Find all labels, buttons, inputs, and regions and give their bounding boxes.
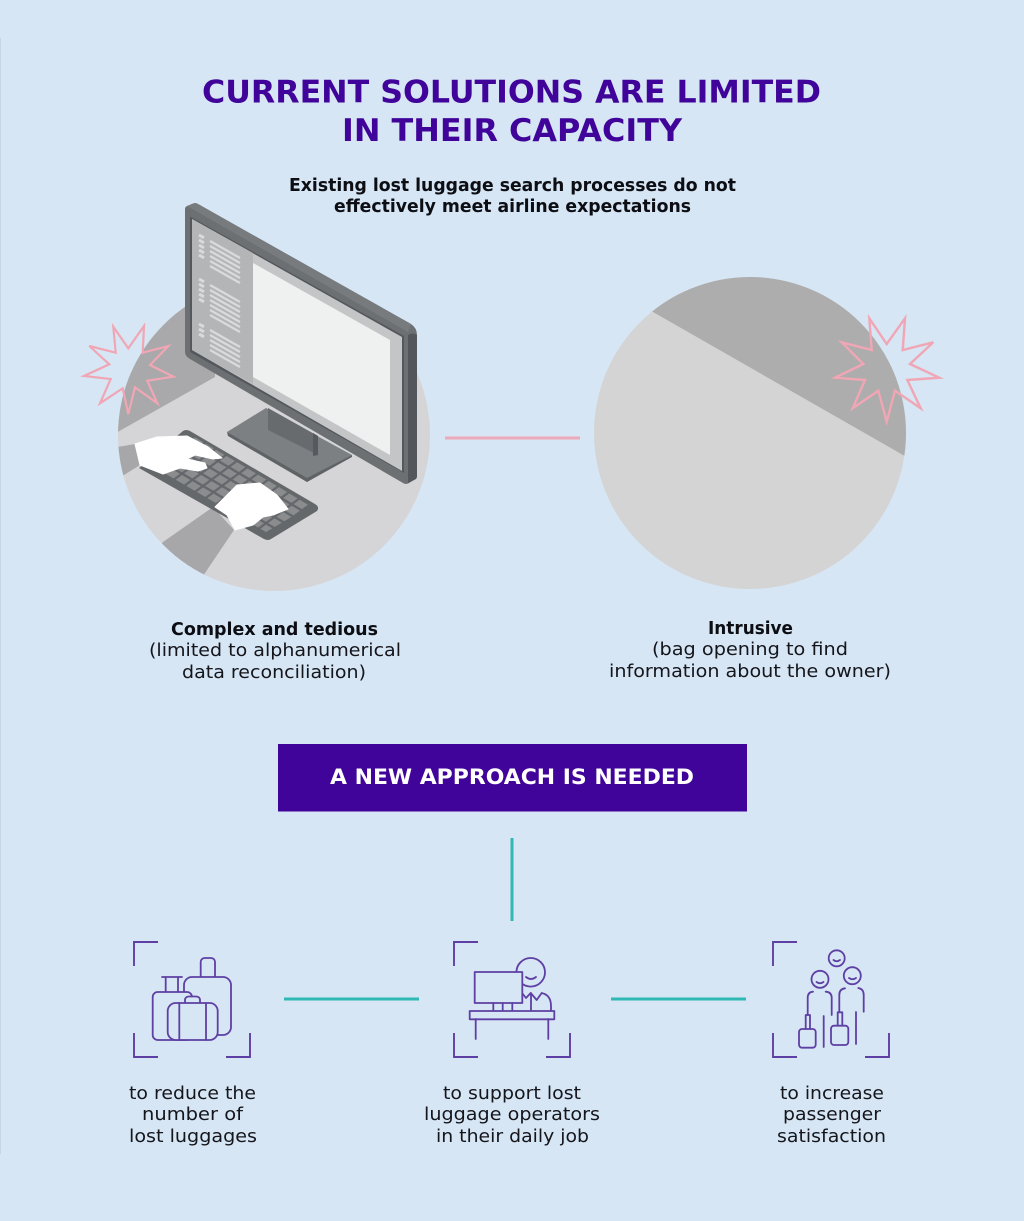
keyboard [139, 430, 318, 540]
caption: increase satisfaction: satisfaction [777, 1127, 886, 1147]
caption: reduce lost luggages: number of [142, 1105, 244, 1125]
connector: teal right [611, 998, 746, 1000]
caption: complex and tedious: data reconciliation) [182, 663, 366, 683]
subtitle: Existing lost luggage search processes do not [289, 176, 736, 196]
caption: intrusive: (bag opening to find [652, 640, 848, 660]
caption: increase satisfaction: to increase [780, 1084, 884, 1104]
icon: luggage [134, 942, 250, 1057]
monitor stand [227, 408, 352, 482]
illustration: intrusive placeholder circle [594, 270, 910, 589]
caption: support operators: luggage operators [424, 1105, 600, 1125]
connector: teal left [284, 998, 419, 1000]
subtitle [289, 176, 736, 217]
title: IN THEIR CAPACITY [342, 113, 683, 149]
caption: support operators [424, 1084, 600, 1147]
hands [135, 436, 288, 530]
illustration: person typing at a computer [100, 203, 430, 600]
caption: complex and tedious: (limited to alphanumerical [149, 641, 401, 661]
monitor [185, 203, 417, 484]
icon: passengers [773, 942, 889, 1057]
caption: support operators: to support lost [443, 1084, 581, 1104]
caption: support operators: in their daily job [436, 1127, 589, 1147]
burst icon right [835, 318, 939, 422]
connector: teal vertical [510, 838, 514, 921]
caption: complex and tedious [149, 620, 401, 683]
caption: increase satisfaction: passenger [783, 1105, 882, 1125]
banner: a new approach is needed: A NEW APPROACH IS NEEDED [330, 765, 694, 789]
title: CURRENT SOLUTIONS ARE LIMITED [202, 74, 821, 110]
caption: reduce lost luggages: to reduce the [129, 1084, 256, 1104]
icon: operator at desk [454, 942, 570, 1057]
caption: intrusive [609, 619, 891, 682]
connector: pink line [445, 436, 580, 440]
title [202, 74, 821, 149]
caption: intrusive: Intrusive [708, 619, 793, 639]
caption: increase satisfaction [777, 1084, 886, 1147]
caption: reduce lost luggages: lost luggages [129, 1127, 257, 1147]
subtitle: effectively meet airline expectations [334, 197, 691, 217]
burst icon left [84, 326, 173, 414]
caption: intrusive: information about the owner) [609, 662, 891, 682]
caption: reduce lost luggages [129, 1084, 257, 1147]
caption: complex and tedious: Complex and tedious [171, 620, 378, 640]
desk circle [118, 307, 430, 591]
banner: a new approach is needed [278, 744, 747, 812]
